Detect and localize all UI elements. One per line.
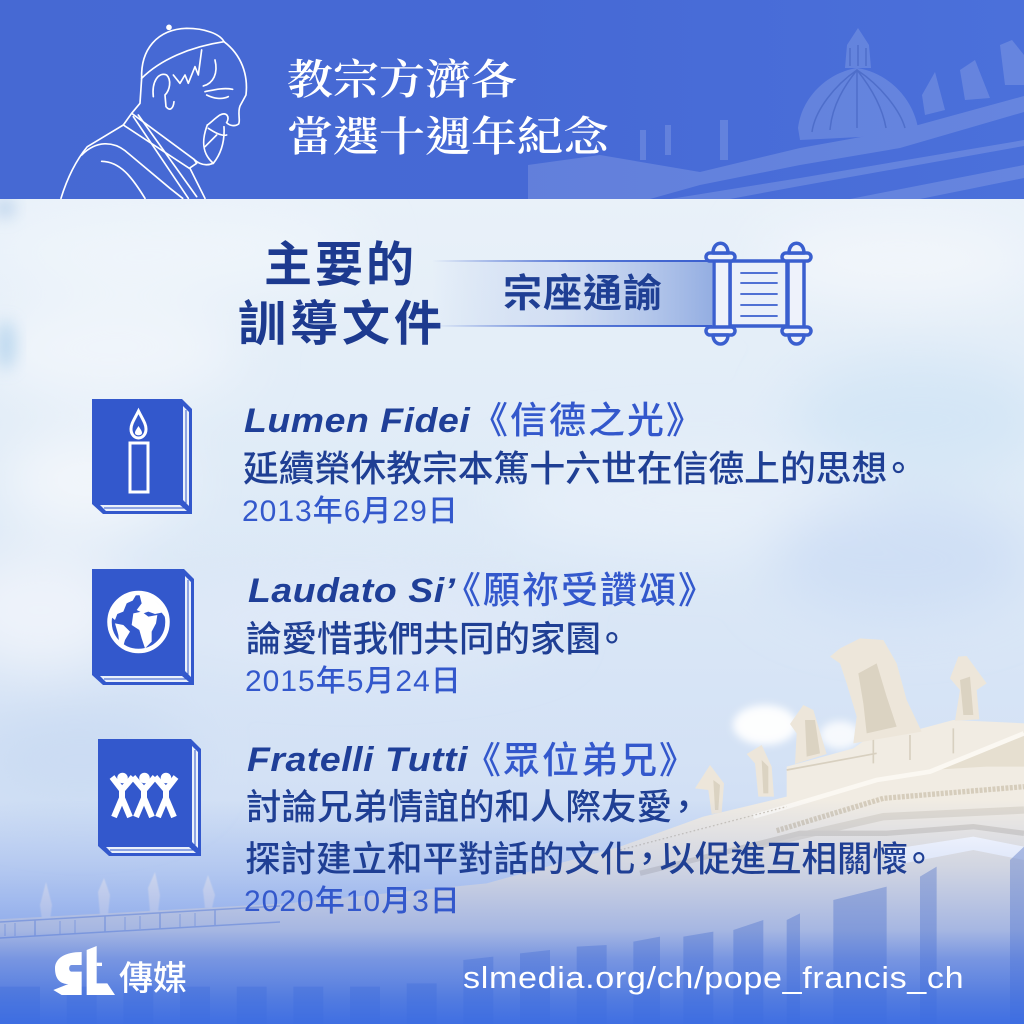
item 2: Laudato Si: 論愛惜我們共同的家園。	[246, 619, 630, 659]
colonnade	[0, 638, 1024, 1024]
item 1: Lumen Fidei: 2013年6月29日	[242, 495, 459, 528]
item 3: Fratelli Tutti: 2020年10月3日	[244, 885, 461, 918]
logo: SL media	[54, 946, 187, 998]
heading: main teaching documents	[238, 239, 446, 351]
columns and shadow gaps	[0, 847, 1024, 1024]
item 1: Lumen Fidei: 延續榮休教宗本篤十六世在信德上的思想。	[243, 449, 916, 489]
basilica silhouette	[528, 28, 1024, 199]
item 3: Fratelli Tutti: Fratelli Tutti	[247, 741, 468, 779]
banner: encyclicals with scroll icon: 宗座通諭	[503, 273, 663, 316]
item 2: Laudato Si: Laudato Si’	[248, 572, 456, 610]
banner: encyclicals with scroll icon	[438, 242, 813, 346]
header band with basilica and pope line art	[0, 0, 1024, 199]
url: slmedia.org/ch/pope_francis_ch	[463, 960, 964, 995]
item 2: Laudato Si: 2015年5月24日	[245, 665, 462, 698]
title: 教宗方濟各	[287, 57, 517, 103]
icon: book with people	[98, 739, 201, 856]
item 2: Laudato Si	[245, 570, 717, 698]
item 3: Fratelli Tutti	[244, 740, 937, 918]
item 1: Lumen Fidei: Lumen Fidei	[244, 402, 470, 440]
item 1: Lumen Fidei	[242, 400, 916, 528]
icon: book with candle	[92, 399, 192, 514]
heading: main teaching documents: 訓導文件	[238, 298, 446, 351]
icon: book with globe	[92, 569, 194, 685]
heading: main teaching documents: 主要的	[264, 239, 417, 292]
logo: SL media: 傳媒	[119, 960, 187, 998]
item 3: Fratelli Tutti: 探討建立和平對話的文化 以促進互相關懷。	[245, 839, 937, 879]
structure	[0, 720, 1024, 1024]
icon: pope line portrait	[61, 25, 246, 198]
item 3: Fratelli Tutti: ，	[630, 839, 665, 879]
title: 當選十週年紀念	[287, 114, 609, 160]
item 3: Fratelli Tutti: ，	[666, 787, 702, 827]
statues	[695, 638, 987, 814]
item 3: Fratelli Tutti: 討論兄弟情誼的和人際友愛	[246, 787, 672, 827]
item 3: Fratelli Tutti: 《眾位弟兄》	[464, 740, 698, 781]
title	[287, 57, 609, 160]
item 2: Laudato Si: 《願祢受讚頌》	[444, 570, 717, 611]
icon: scroll	[706, 243, 811, 344]
item 1: Lumen Fidei: 《信德之光》	[471, 400, 705, 441]
